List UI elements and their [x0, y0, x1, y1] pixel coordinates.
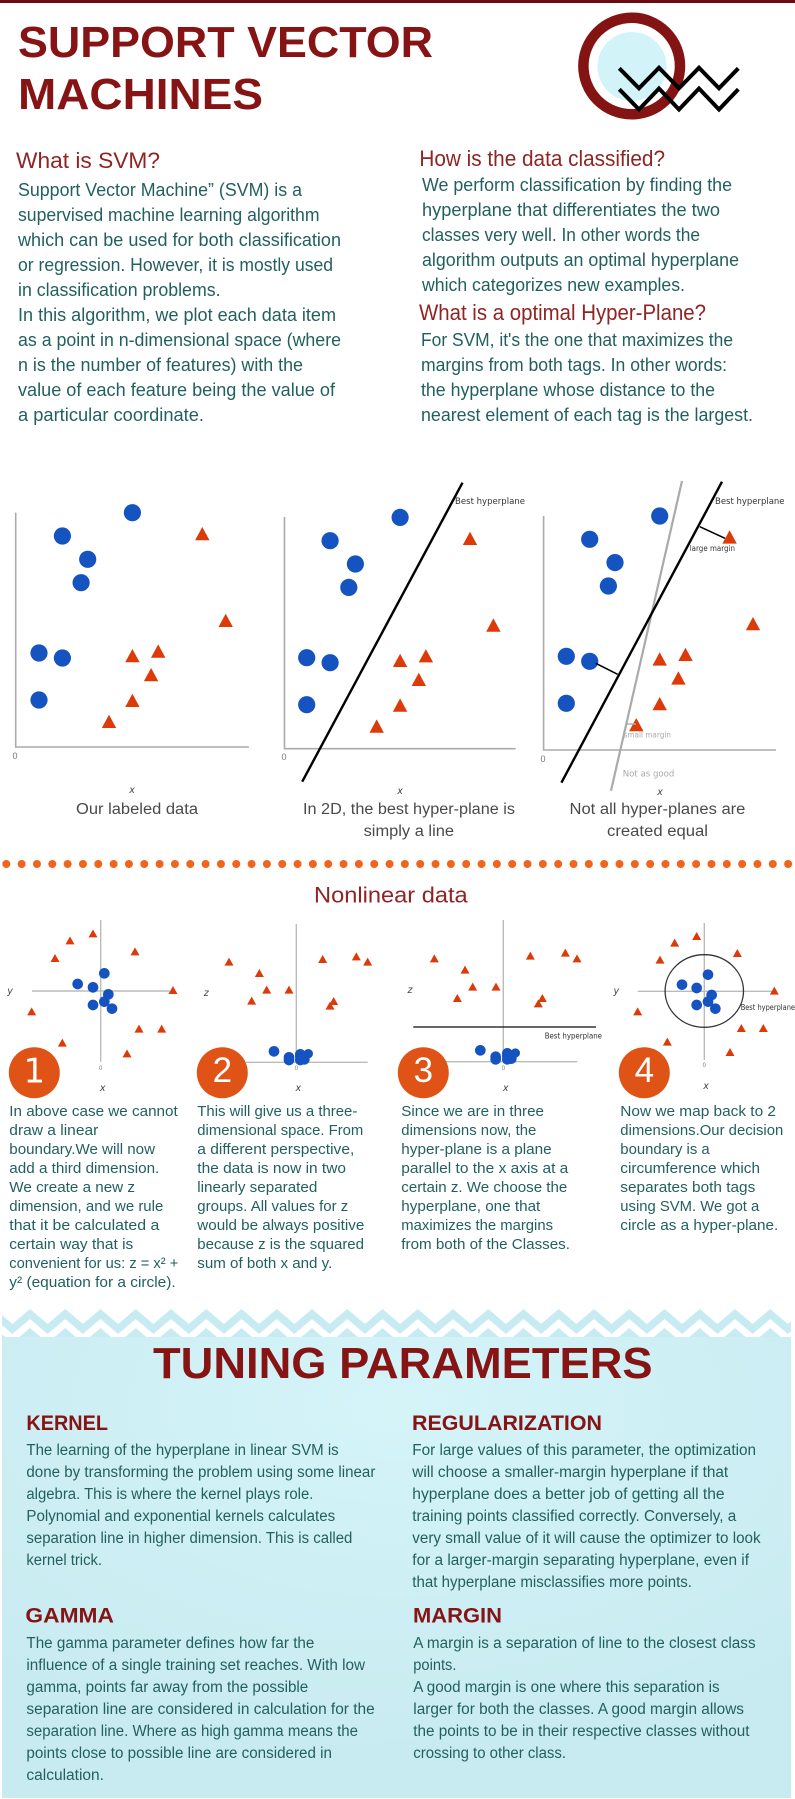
- text block: optimal hyper-plane: [419, 300, 753, 425]
- chart: best hyperplane: [281, 483, 525, 797]
- text block: step 2: sum of both x and y.: [197, 1255, 332, 1272]
- badge: step 4: [619, 1047, 670, 1098]
- text block: step 3: hyperplane, one that: [401, 1198, 541, 1215]
- chart: large and small margins: 0: [540, 754, 546, 764]
- parameter: kernel: Polynomial and exponential kernels calculates: [26, 1508, 335, 1525]
- text block: step 4: circumference which: [620, 1160, 760, 1177]
- badge: step 3: [398, 1047, 449, 1098]
- chart: step 4 circular boundary: y: [612, 986, 619, 997]
- parameter: regularization: training points classified correctly. Conversely, a: [412, 1508, 737, 1525]
- text block: step 4: separates both tags: [620, 1179, 755, 1196]
- chart: step 2 three-dimensional scatter: z: [203, 988, 210, 999]
- text block: how is the data classified: [419, 146, 739, 295]
- text block: step 2: linearly separated: [197, 1179, 317, 1196]
- body: how is the data classified: algorithm outputs an optimal hyperplane: [422, 250, 739, 270]
- parameter: kernel: [26, 1412, 375, 1569]
- text block: step 3: Since we are in three: [401, 1103, 544, 1120]
- caption: not all hyper-planes: created equal: [607, 823, 708, 840]
- heading: nonlinear data: Nonlinear data: [314, 883, 469, 908]
- text block: step 1: dimension, and we rule: [9, 1198, 163, 1215]
- text block: step 2: dimensional space. From: [197, 1122, 363, 1139]
- parameter: regularization: [411, 1412, 761, 1591]
- body: what is SVM: or regression. However, it is mostly used: [18, 255, 333, 275]
- chart: step 2 three-dimensional scatter: x: [294, 1083, 301, 1094]
- chart: labeled data: [12, 504, 249, 796]
- parameter: margin: the points to be in their respective classes without: [413, 1723, 750, 1740]
- body: how is the data classified: which categorizes new examples.: [421, 275, 685, 295]
- text block: step 1: certain way that is: [9, 1236, 133, 1253]
- body: how is the data classified: We perform classification by finding the: [422, 175, 732, 195]
- body: what is SVM: Support Vector Machine” (SVM) is a: [18, 180, 303, 200]
- body: what is SVM: as a point in n-dimensional space (where: [18, 330, 341, 350]
- parameter: margin: crossing to other class.: [413, 1745, 566, 1762]
- text block: step 1: boundary.We will now: [9, 1141, 155, 1158]
- text block: step 3: [401, 1103, 570, 1253]
- parameter: gamma: GAMMA: [25, 1605, 114, 1628]
- title: MACHINES: [18, 70, 263, 119]
- body: what is SVM: in classification problems.: [18, 280, 221, 300]
- chart: large and small margins: Not as good: [623, 770, 674, 780]
- parameter: regularization: REGULARIZATION: [412, 1412, 602, 1435]
- parameter: gamma: separation line are considered in calculation for the: [26, 1701, 375, 1718]
- chart: step 4 circular boundary: 0: [703, 1063, 707, 1069]
- text block: step 4: circle as a hyper-plane.: [620, 1217, 778, 1234]
- badge: step 1: 1: [23, 1052, 45, 1092]
- text block: step 1: y² (equation for a circle).: [9, 1274, 176, 1291]
- parameter: kernel: kernel trick.: [26, 1552, 102, 1569]
- chart: step 1 scatter: y: [6, 986, 13, 997]
- caption: best hyper-plane: [303, 801, 515, 840]
- heading: tuning parameters: TUNING PARAMETERS: [153, 1339, 653, 1388]
- chart: step 2 three-dimensional scatter: [203, 924, 372, 1094]
- text block: step 2: because z is the squared: [197, 1236, 364, 1253]
- caption: best hyper-plane: simply a line: [364, 823, 454, 840]
- chart: step 1 scatter: [6, 920, 177, 1094]
- parameter: regularization: very small value of it will cause the optimizer to look: [412, 1530, 761, 1547]
- parameter: margin: larger for both the classes. A good margin allows: [413, 1701, 744, 1718]
- parameter: kernel: done by transforming the problem using some linear: [26, 1464, 375, 1481]
- parameter: kernel: algebra. This is where the kernel plays role.: [26, 1486, 313, 1503]
- title: [18, 18, 433, 119]
- text block: step 1: [9, 1103, 179, 1291]
- parameter: regularization: For large values of this parameter, the optimization: [412, 1442, 756, 1459]
- caption: not all hyper-planes: Not all hyper-planes are: [570, 801, 745, 818]
- body: what is SVM: supervised machine learning algorithm: [18, 205, 320, 225]
- text block: step 1: that it be calculated a: [9, 1217, 160, 1234]
- chart: step 3 plane separation: x: [502, 1083, 509, 1094]
- parameter: margin: [413, 1605, 756, 1762]
- chart: best hyperplane: Best hyperplane: [455, 497, 525, 507]
- text block: what is SVM: [16, 148, 341, 425]
- chart: step 3 plane separation: z: [406, 985, 414, 996]
- chart: step 1 scatter: x: [99, 1083, 106, 1094]
- caption: not all hyper-planes: [570, 801, 745, 840]
- text block: step 2: groups. All values for z: [197, 1198, 348, 1215]
- badge: step 4: 4: [635, 1051, 654, 1090]
- heading: optimal hyper-plane: What is a optimal Hyper-Plane?: [419, 300, 706, 325]
- badge: step 3: 3: [414, 1051, 433, 1090]
- body: what is SVM: a particular coordinate.: [18, 405, 204, 425]
- text block: step 2: [196, 1103, 364, 1272]
- parameter: gamma: points close to possible line are considered in: [26, 1745, 332, 1762]
- parameter: regularization: will choose a smaller-margin hyperplane if that: [411, 1464, 729, 1481]
- badge: step 2: [197, 1047, 248, 1098]
- chart: step 3 plane separation: 0: [502, 1066, 506, 1072]
- caption: labeled data: Our labeled data: [76, 801, 198, 818]
- parameter: kernel: separation line in higher dimension. This is called: [26, 1530, 352, 1547]
- text block: step 3: hyper-plane is a plane: [401, 1141, 552, 1158]
- text block: step 3: parallel to the x axis at a: [401, 1160, 569, 1177]
- text block: step 3: from both of the Classes.: [401, 1236, 570, 1253]
- body: optimal hyper-plane: margins from both tags. In other words:: [421, 355, 727, 375]
- parameter: regularization: hyperplane does a better job of getting all the: [412, 1486, 725, 1503]
- parameter: gamma: influence of a single training set reaches. With low: [26, 1657, 366, 1674]
- text block: step 3: dimensions now, the: [401, 1122, 536, 1139]
- parameter: gamma: separation line. Where as high gamma means the: [26, 1723, 358, 1740]
- parameter: margin: A margin is a separation of line to the closest class: [413, 1635, 756, 1652]
- body: optimal hyper-plane: For SVM, it's the one that maximizes the: [421, 330, 733, 350]
- text block: step 4: boundary is a: [620, 1141, 710, 1158]
- chart: labeled data: 0: [12, 751, 18, 761]
- chart: best hyperplane: 0: [281, 752, 287, 762]
- text block: step 3: maximizes the margins: [401, 1217, 553, 1234]
- chart: large and small margins: large margin: [690, 544, 735, 553]
- caption: best hyper-plane: In 2D, the best hyper-plane is: [303, 801, 515, 818]
- text block: step 4: using SVM. We got a: [620, 1198, 760, 1215]
- title: SUPPORT VECTOR: [18, 18, 433, 67]
- chart: step 4 circular boundary: [612, 923, 795, 1092]
- body: what is SVM: value of each feature being the value of: [18, 380, 336, 400]
- body: how is the data classified: [421, 175, 739, 295]
- parameter: gamma: [25, 1605, 375, 1784]
- text block: step 2: a different perspective,: [197, 1141, 354, 1158]
- body: optimal hyper-plane: the hyperplane whose distance to the: [421, 380, 715, 400]
- body: what is SVM: n is the number of features) with the: [18, 355, 303, 375]
- parameter: gamma: gamma, points far away from the possible: [26, 1679, 308, 1696]
- chart: step 2 three-dimensional scatter: 0: [295, 1066, 299, 1072]
- icon: ring and zigzag logo: [583, 18, 738, 114]
- text block: step 2: This will give us a three-: [197, 1103, 357, 1120]
- parameter: kernel: KERNEL: [26, 1412, 108, 1435]
- chart: large and small margins: x: [656, 787, 663, 798]
- parameter: gamma: The gamma parameter defines how far the: [26, 1635, 314, 1652]
- parameter: gamma: calculation.: [26, 1767, 104, 1784]
- parameter: margin: A good margin is one where this separation is: [413, 1679, 720, 1696]
- heading: what is SVM: What is SVM?: [16, 148, 160, 173]
- chart: labeled data: x: [128, 785, 135, 796]
- parameter: regularization: for a larger-margin separating hyperplane, even if: [412, 1552, 750, 1569]
- text block: step 1: draw a linear: [9, 1122, 98, 1139]
- body: how is the data classified: hyperplane that differentiates the two: [422, 200, 720, 220]
- body: what is SVM: In this algorithm, we plot each data item: [18, 305, 336, 325]
- parameter: regularization: that hyperplane misclassifies more points.: [412, 1574, 692, 1591]
- text block: step 2: the data is now in two: [197, 1160, 346, 1177]
- chart: step 3 plane separation: [406, 920, 602, 1094]
- body: what is SVM: [17, 180, 341, 425]
- badge: step 1: [9, 1047, 60, 1098]
- body: how is the data classified: classes very well. In other words the: [422, 225, 700, 245]
- parameter: margin: points.: [413, 1657, 456, 1674]
- chart: large and small margins: Best hyperplane: [715, 497, 785, 507]
- text block: step 4: Now we map back to 2: [620, 1103, 776, 1120]
- chart: step 3 plane separation: Best hyperplane: [545, 1032, 602, 1041]
- body: what is SVM: which can be used for both classification: [17, 230, 341, 250]
- chart: step 4 circular boundary: x: [702, 1081, 709, 1092]
- text block: step 1: add a third dimension.: [9, 1160, 159, 1177]
- chart: large and small margins: [540, 481, 785, 798]
- text block: step 3: certain z. We choose the: [401, 1179, 567, 1196]
- text block: step 4: [620, 1103, 783, 1234]
- parameter: kernel: The learning of the hyperplane in linear SVM is: [26, 1442, 339, 1459]
- badge: step 2: 2: [213, 1051, 232, 1090]
- body: optimal hyper-plane: [421, 330, 753, 425]
- text block: step 2: would be always positive: [196, 1217, 364, 1234]
- chart: best hyperplane: x: [396, 786, 403, 797]
- chart: step 1 scatter: 0: [99, 1066, 103, 1072]
- body: optimal hyper-plane: nearest element of each tag is the largest.: [421, 405, 753, 425]
- chart: large and small margins: small margin: [624, 731, 671, 740]
- text block: step 4: dimensions.Our decision: [620, 1122, 783, 1139]
- text block: step 1: We create a new z: [9, 1179, 135, 1196]
- text block: step 1: convenient for us: z = x² +: [9, 1255, 179, 1272]
- parameter: margin: MARGIN: [413, 1605, 502, 1628]
- text block: step 1: In above case we cannot: [9, 1103, 179, 1120]
- heading: how is the data classified: How is the data classified?: [419, 146, 665, 171]
- panel: tuning parameters: [2, 1337, 791, 1798]
